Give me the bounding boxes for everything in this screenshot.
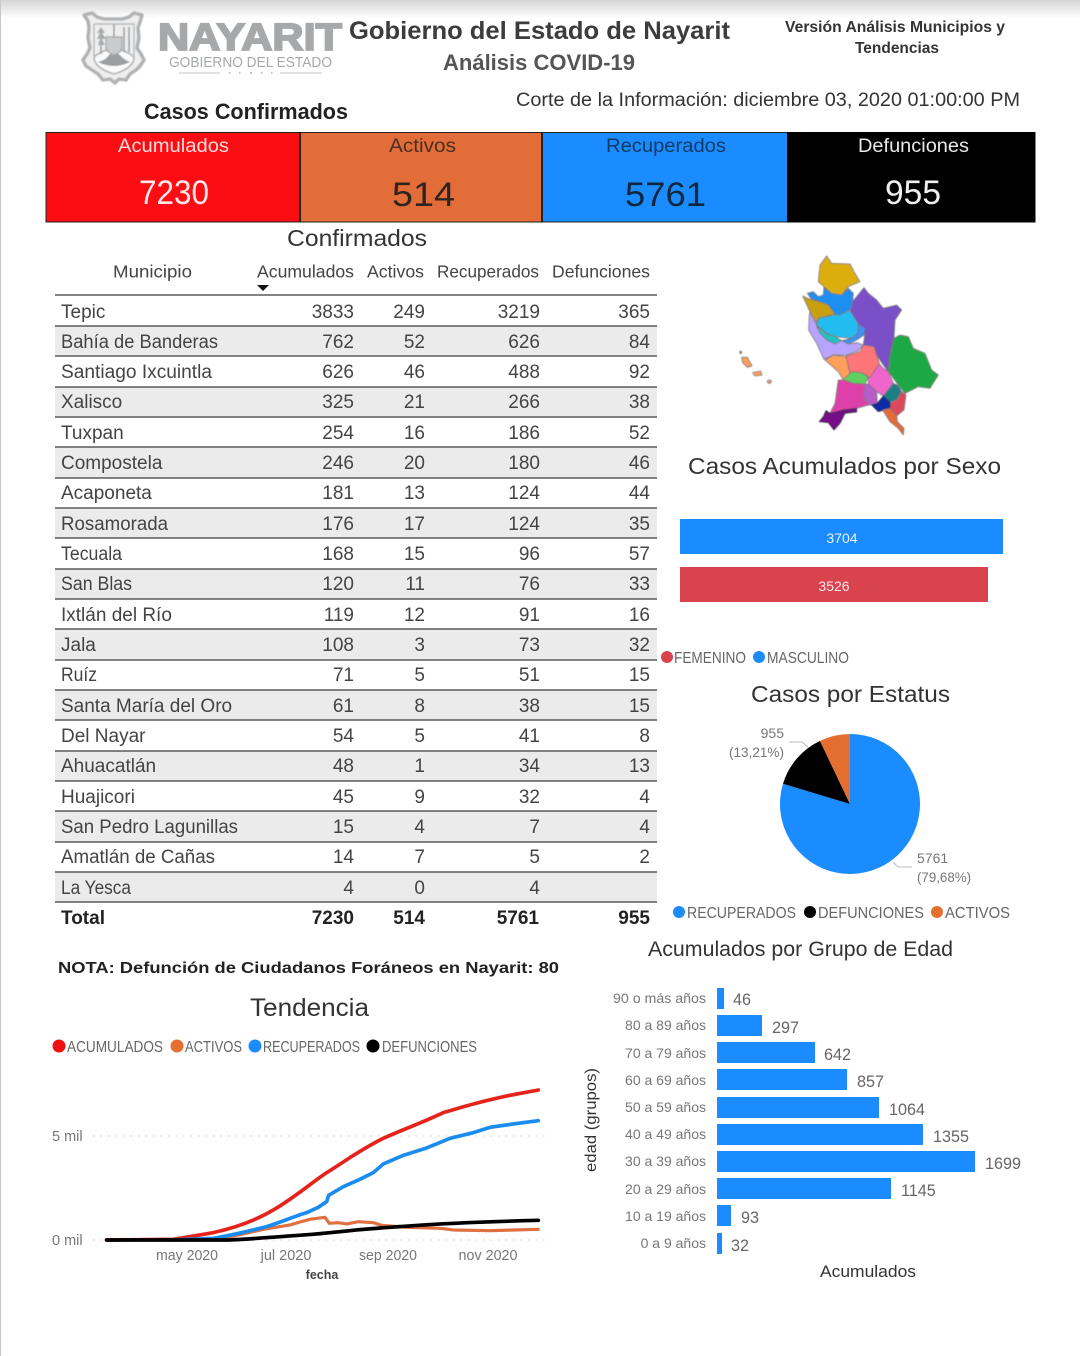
bar: 70 a 79 años bbox=[625, 1042, 851, 1064]
row: Huajicori: 32 bbox=[519, 787, 540, 808]
bar: 80 a 89 años bbox=[625, 1015, 799, 1037]
series: defunciones bbox=[107, 1220, 538, 1240]
bar: 0 a 9 años: 0 a 9 años bbox=[641, 1235, 706, 1251]
row: San Pedro Lagunillas: 4 bbox=[414, 817, 425, 838]
row: Rosamorada: Rosamorada bbox=[61, 514, 168, 535]
bar: 30 a 39 años: 1699 bbox=[985, 1155, 1021, 1173]
bar: 40 a 49 años: 1355 bbox=[933, 1128, 969, 1146]
row: Total: 5761 bbox=[497, 908, 539, 929]
table header: Activos bbox=[367, 262, 424, 282]
KPI: activos bbox=[301, 133, 541, 222]
row: Del Nayar: 54 bbox=[333, 726, 354, 747]
row: Total: 514 bbox=[393, 908, 425, 929]
row: Xalisco: 38 bbox=[629, 392, 650, 413]
KPI: activos: Activos bbox=[389, 135, 456, 157]
row: La Yesca: La Yesca bbox=[61, 878, 131, 899]
bar: 70 a 79 años: 70 a 79 años bbox=[625, 1045, 706, 1061]
row: Rosamorada: 35 bbox=[629, 514, 650, 535]
row: Acaponeta: 124 bbox=[508, 483, 540, 504]
row: Ruíz bbox=[61, 665, 650, 686]
row: La Yesca: 4 bbox=[529, 878, 540, 899]
row: Del Nayar: 41 bbox=[519, 726, 540, 747]
row: Acaponeta: 13 bbox=[404, 483, 425, 504]
row: Tepic: 249 bbox=[393, 302, 425, 323]
row: Tecuala bbox=[61, 544, 650, 565]
row: Santiago Ixcuintla: 626 bbox=[322, 362, 354, 383]
row: Jala: 32 bbox=[629, 635, 650, 656]
legend: trend: DEFUNCIONES bbox=[382, 1039, 477, 1056]
row: Amatlán de Cañas bbox=[61, 847, 650, 868]
row: Ahuacatlán: 1 bbox=[414, 756, 425, 777]
row: Ahuacatlán: 34 bbox=[519, 756, 540, 777]
bar chart: cases by age group bbox=[583, 988, 1021, 1281]
row: Ruíz: Ruíz bbox=[61, 665, 97, 686]
row: San Blas: San Blas bbox=[61, 574, 132, 595]
pie label: recuperados: 5761 bbox=[917, 850, 948, 866]
row: San Blas: 11 bbox=[405, 574, 425, 595]
heading: confirmados: Confirmados bbox=[287, 225, 427, 251]
bar: 20 a 29 años bbox=[625, 1178, 936, 1200]
series: acumulados bbox=[107, 1090, 538, 1240]
row: Santa María del Oro: Santa María del Oro bbox=[61, 696, 232, 717]
bar: 60 a 69 años bbox=[625, 1069, 884, 1091]
bar: 20 a 29 años: 20 a 29 años bbox=[625, 1181, 706, 1197]
row: Amatlán de Cañas: Amatlán de Cañas bbox=[61, 847, 215, 868]
row: Bahía de Banderas: 52 bbox=[404, 332, 425, 353]
note: foreign citizen deaths: NOTA: Defunción de Ciudadanos Foráneos en Nayarit: 80 bbox=[58, 960, 559, 977]
row: Bahía de Banderas: 626 bbox=[508, 332, 540, 353]
title: Gobierno del Estado de Nayarit bbox=[349, 17, 731, 45]
bar: 10 a 19 años: 93 bbox=[741, 1209, 759, 1227]
wordmark: Gobierno del Estado: GOBIERNO DEL ESTADO bbox=[169, 54, 332, 71]
bar: 30 a 39 años bbox=[625, 1151, 1021, 1173]
row: Tuxpan: Tuxpan bbox=[61, 423, 124, 444]
version note: Versión Análisis Municipios y bbox=[785, 19, 1005, 36]
row: Tuxpan bbox=[61, 423, 650, 444]
row: Tecuala: 96 bbox=[519, 544, 540, 565]
KPI: defunciones bbox=[787, 132, 1036, 222]
line chart: trend bbox=[52, 1090, 550, 1282]
row: Xalisco: 325 bbox=[322, 392, 354, 413]
x axis labels bbox=[156, 1248, 518, 1264]
row: Santiago Ixcuintla: 46 bbox=[404, 362, 425, 383]
row: Jala bbox=[61, 635, 650, 656]
pie label: recuperados: (79,68%) bbox=[917, 869, 971, 885]
data cut-off date: Corte de la Información: diciembre 03, 2020 01:00:00 PM bbox=[516, 90, 1020, 111]
row: Tecuala: 168 bbox=[322, 544, 354, 565]
row: Tecuala: 57 bbox=[629, 544, 650, 565]
heading: tendencia: Tendencia bbox=[250, 994, 369, 1022]
row: Tuxpan: 52 bbox=[629, 423, 650, 444]
row: Del Nayar: 5 bbox=[414, 726, 425, 747]
wordmark: NAYARIT: NAYARIT bbox=[158, 17, 342, 59]
bar: 90 o más años: 46 bbox=[733, 991, 751, 1009]
table header: Acumulados bbox=[257, 262, 354, 282]
y axis labels: 5 mil bbox=[52, 1129, 83, 1145]
legend: trend bbox=[52, 1039, 477, 1056]
row: Compostela: 20 bbox=[404, 453, 425, 474]
pie label: defunciones: (13,21%) bbox=[729, 744, 784, 760]
KPI: acumulados: Acumulados bbox=[118, 135, 229, 157]
row: Ixtlán del Río: 119 bbox=[324, 605, 354, 626]
row: Xalisco bbox=[61, 392, 650, 413]
table header: Recuperados bbox=[437, 262, 539, 282]
bar: 50 a 59 años: 1064 bbox=[889, 1101, 925, 1119]
legend: status: ACTIVOS bbox=[945, 905, 1010, 922]
row: San Pedro Lagunillas bbox=[61, 817, 650, 838]
row: Huajicori: 9 bbox=[414, 787, 425, 808]
row: Ixtlán del Río: 91 bbox=[519, 605, 540, 626]
bar: 90 o más años: 90 o más años bbox=[613, 990, 706, 1006]
row: Ruíz: 71 bbox=[333, 665, 354, 686]
row: Rosamorada: 176 bbox=[322, 514, 354, 535]
series: activos bbox=[173, 1217, 538, 1240]
row: Tuxpan: 186 bbox=[508, 423, 540, 444]
row: Santiago Ixcuintla bbox=[61, 362, 650, 383]
row: Compostela: 46 bbox=[629, 453, 650, 474]
row: Amatlán de Cañas: 2 bbox=[639, 847, 650, 868]
row: Amatlán de Cañas: 7 bbox=[414, 847, 425, 868]
title: Análisis COVID-19 bbox=[443, 50, 635, 75]
row: Santiago Ixcuintla: 488 bbox=[508, 362, 540, 383]
row: Ahuacatlán: 13 bbox=[629, 756, 650, 777]
legend: status: RECUPERADOS bbox=[687, 905, 796, 922]
row: Rosamorada: 17 bbox=[404, 514, 425, 535]
legend: status: DEFUNCIONES bbox=[818, 905, 924, 922]
row: Ruíz: 15 bbox=[629, 665, 650, 686]
pie chart: cases by status bbox=[729, 725, 971, 885]
logo: Nayarit state crest and wordmark bbox=[83, 13, 342, 83]
title bbox=[349, 17, 731, 75]
table header: Municipio bbox=[113, 262, 192, 282]
row: San Pedro Lagunillas: 7 bbox=[529, 817, 540, 838]
legend: trend: RECUPERADOS bbox=[263, 1039, 360, 1056]
row: La Yesca bbox=[61, 878, 540, 899]
row: Tepic bbox=[61, 302, 650, 323]
row: Tepic: 3219 bbox=[498, 302, 540, 323]
row: Tepic: 365 bbox=[618, 302, 650, 323]
table header: Defunciones bbox=[552, 262, 650, 282]
bar: 40 a 49 años: 40 a 49 años bbox=[625, 1126, 706, 1142]
table header bbox=[113, 262, 650, 291]
legend: sex: FEMENINO bbox=[674, 650, 746, 667]
bar: 0 a 9 años: 32 bbox=[731, 1237, 749, 1255]
row: Tuxpan: 254 bbox=[322, 423, 354, 444]
row: Compostela bbox=[61, 453, 650, 474]
row: Tepic: Tepic bbox=[61, 302, 105, 323]
bar: 80 a 89 años: 297 bbox=[772, 1019, 799, 1037]
row: Jala: Jala bbox=[61, 635, 96, 656]
row: Del Nayar: 8 bbox=[639, 726, 650, 747]
row: Santa María del Oro: 15 bbox=[629, 696, 650, 717]
KPI: recuperados: Recuperados bbox=[606, 135, 726, 157]
bar: 80 a 89 años: 80 a 89 años bbox=[625, 1017, 706, 1033]
x axis labels: jul 2020 bbox=[260, 1248, 311, 1264]
row: Tecuala: Tecuala bbox=[61, 544, 122, 565]
row: Ruíz: 51 bbox=[519, 665, 540, 686]
bar: 70 a 79 años: 642 bbox=[824, 1046, 851, 1064]
heading: acumulados por grupo de edad: Acumulados por Grupo de Edad bbox=[648, 937, 953, 961]
row: Total: 7230 bbox=[312, 908, 354, 929]
bar: 30 a 39 años: 30 a 39 años bbox=[625, 1153, 706, 1169]
row: Santiago Ixcuintla: Santiago Ixcuintla bbox=[61, 362, 212, 383]
row: Acaponeta: Acaponeta bbox=[61, 483, 152, 504]
row: San Blas: 120 bbox=[322, 574, 354, 595]
KPI: recuperados bbox=[543, 133, 787, 222]
x axis labels: nov 2020 bbox=[458, 1248, 518, 1264]
series: recuperados bbox=[173, 1121, 538, 1240]
legend: sex: MASCULINO bbox=[767, 650, 849, 667]
bar: 0 a 9 años bbox=[641, 1233, 749, 1255]
row: La Yesca: 4 bbox=[343, 878, 354, 899]
KPI: acumulados bbox=[46, 133, 299, 222]
heading: casos confirmados: Casos Confirmados bbox=[144, 99, 348, 124]
row: Acaponeta: 44 bbox=[629, 483, 650, 504]
row: Xalisco: 21 bbox=[404, 392, 425, 413]
bar: 40 a 49 años bbox=[625, 1124, 969, 1146]
row: Del Nayar: Del Nayar bbox=[61, 726, 146, 747]
KPI: defunciones: 955 bbox=[885, 174, 941, 212]
row: Ixtlán del Río: 16 bbox=[629, 605, 650, 626]
x axis labels: sep 2020 bbox=[359, 1248, 417, 1264]
panel: KPI cards bbox=[46, 132, 1036, 222]
bar: masculino bbox=[680, 519, 1003, 554]
KPI: acumulados: 7230 bbox=[139, 174, 209, 212]
row: La Yesca: 0 bbox=[414, 878, 425, 899]
bar: 50 a 59 años bbox=[625, 1097, 925, 1119]
bar: 60 a 69 años: 60 a 69 años bbox=[625, 1072, 706, 1088]
row: Total bbox=[61, 908, 650, 929]
bar: 20 a 29 años: 1145 bbox=[901, 1182, 936, 1200]
row: Bahía de Banderas bbox=[61, 332, 650, 353]
pie label: defunciones: 955 bbox=[761, 725, 784, 741]
y axis labels bbox=[52, 1129, 83, 1249]
x axis title: Acumulados bbox=[820, 1263, 916, 1281]
pie label: recuperados bbox=[917, 850, 971, 885]
row: Ahuacatlán: 48 bbox=[333, 756, 354, 777]
row: Santa María del Oro bbox=[61, 696, 650, 717]
row: Jala: 73 bbox=[519, 635, 540, 656]
row: Huajicori bbox=[61, 787, 650, 808]
row: Acaponeta: 181 bbox=[322, 483, 354, 504]
x axis title: fecha bbox=[306, 1268, 339, 1282]
map: municipalities of Nayarit bbox=[740, 256, 938, 435]
row: Total: Total bbox=[61, 908, 105, 929]
bar: femenino bbox=[680, 567, 988, 602]
row: Ahuacatlán bbox=[61, 756, 650, 777]
row: Huajicori: 45 bbox=[333, 787, 354, 808]
row: Santa María del Oro: 38 bbox=[519, 696, 540, 717]
bar: 10 a 19 años: 10 a 19 años bbox=[625, 1208, 706, 1224]
version note: Tendencias bbox=[855, 40, 939, 57]
y axis labels: 0 mil bbox=[52, 1233, 83, 1249]
row: Jala: 108 bbox=[322, 635, 354, 656]
row: San Blas bbox=[61, 574, 650, 595]
bar: 60 a 69 años: 857 bbox=[857, 1073, 884, 1091]
row: Bahía de Banderas: 84 bbox=[629, 332, 650, 353]
row: Amatlán de Cañas: 14 bbox=[333, 847, 354, 868]
row: Tuxpan: 16 bbox=[404, 423, 425, 444]
heading: casos acumulados por sexo: Casos Acumulados por Sexo bbox=[688, 453, 1001, 479]
bar: femenino: 3526 bbox=[818, 578, 850, 594]
row: Bahía de Banderas: 762 bbox=[322, 332, 354, 353]
row: Bahía de Banderas: Bahía de Banderas bbox=[61, 332, 218, 353]
legend: trend: ACUMULADOS bbox=[67, 1039, 163, 1056]
row: Ahuacatlán: Ahuacatlán bbox=[61, 756, 156, 777]
row: Xalisco: 266 bbox=[508, 392, 540, 413]
row: San Pedro Lagunillas: 15 bbox=[333, 817, 354, 838]
row: Amatlán de Cañas: 5 bbox=[529, 847, 540, 868]
legend: status bbox=[673, 905, 1010, 922]
row: Rosamorada: 124 bbox=[508, 514, 540, 535]
row: San Blas: 33 bbox=[629, 574, 650, 595]
row: Compostela: Compostela bbox=[61, 453, 163, 474]
y axis title: edad (grupos) bbox=[583, 1068, 600, 1172]
legend: trend: ACTIVOS bbox=[185, 1039, 242, 1056]
row: Acaponeta bbox=[61, 483, 650, 504]
pie label: defunciones bbox=[729, 725, 784, 760]
heading: casos por estatus: Casos por Estatus bbox=[751, 681, 950, 707]
legend: sex bbox=[661, 650, 849, 667]
row: Santiago Ixcuintla: 92 bbox=[629, 362, 650, 383]
x axis labels: may 2020 bbox=[156, 1248, 218, 1264]
row: Santa María del Oro: 61 bbox=[333, 696, 354, 717]
row: San Pedro Lagunillas: San Pedro Lagunillas bbox=[61, 817, 238, 838]
row: Compostela: 180 bbox=[508, 453, 540, 474]
bar: masculino: 3704 bbox=[826, 530, 858, 546]
row: Compostela: 246 bbox=[322, 453, 354, 474]
KPI: activos: 514 bbox=[392, 176, 455, 214]
KPI: recuperados: 5761 bbox=[625, 176, 706, 214]
row: Del Nayar bbox=[61, 726, 650, 747]
row: Ixtlán del Río: Ixtlán del Río bbox=[61, 605, 172, 626]
bar chart: cases by sex bbox=[680, 519, 1003, 602]
icon: state crest bbox=[83, 13, 144, 83]
row: San Pedro Lagunillas: 4 bbox=[639, 817, 650, 838]
row: Ixtlán del Río bbox=[61, 605, 650, 626]
bar: 10 a 19 años bbox=[625, 1205, 759, 1227]
KPI: defunciones: Defunciones bbox=[858, 135, 969, 157]
row: Xalisco: Xalisco bbox=[61, 392, 122, 413]
row: San Blas: 76 bbox=[519, 574, 540, 595]
row: Tepic: 3833 bbox=[312, 302, 354, 323]
row: Ruíz: 5 bbox=[414, 665, 425, 686]
bar: 90 o más años bbox=[613, 988, 751, 1009]
row: Santa María del Oro: 8 bbox=[414, 696, 425, 717]
version note bbox=[785, 19, 1005, 57]
row: Ixtlán del Río: 12 bbox=[404, 605, 425, 626]
row: Huajicori: 4 bbox=[639, 787, 650, 808]
bar: 50 a 59 años: 50 a 59 años bbox=[625, 1099, 706, 1115]
row: Rosamorada bbox=[61, 514, 650, 535]
row: Huajicori: Huajicori bbox=[61, 787, 135, 808]
row: Jala: 3 bbox=[414, 635, 425, 656]
table: municipalities bbox=[55, 262, 657, 929]
row: Tecuala: 15 bbox=[404, 544, 425, 565]
row: Total: 955 bbox=[618, 908, 650, 929]
